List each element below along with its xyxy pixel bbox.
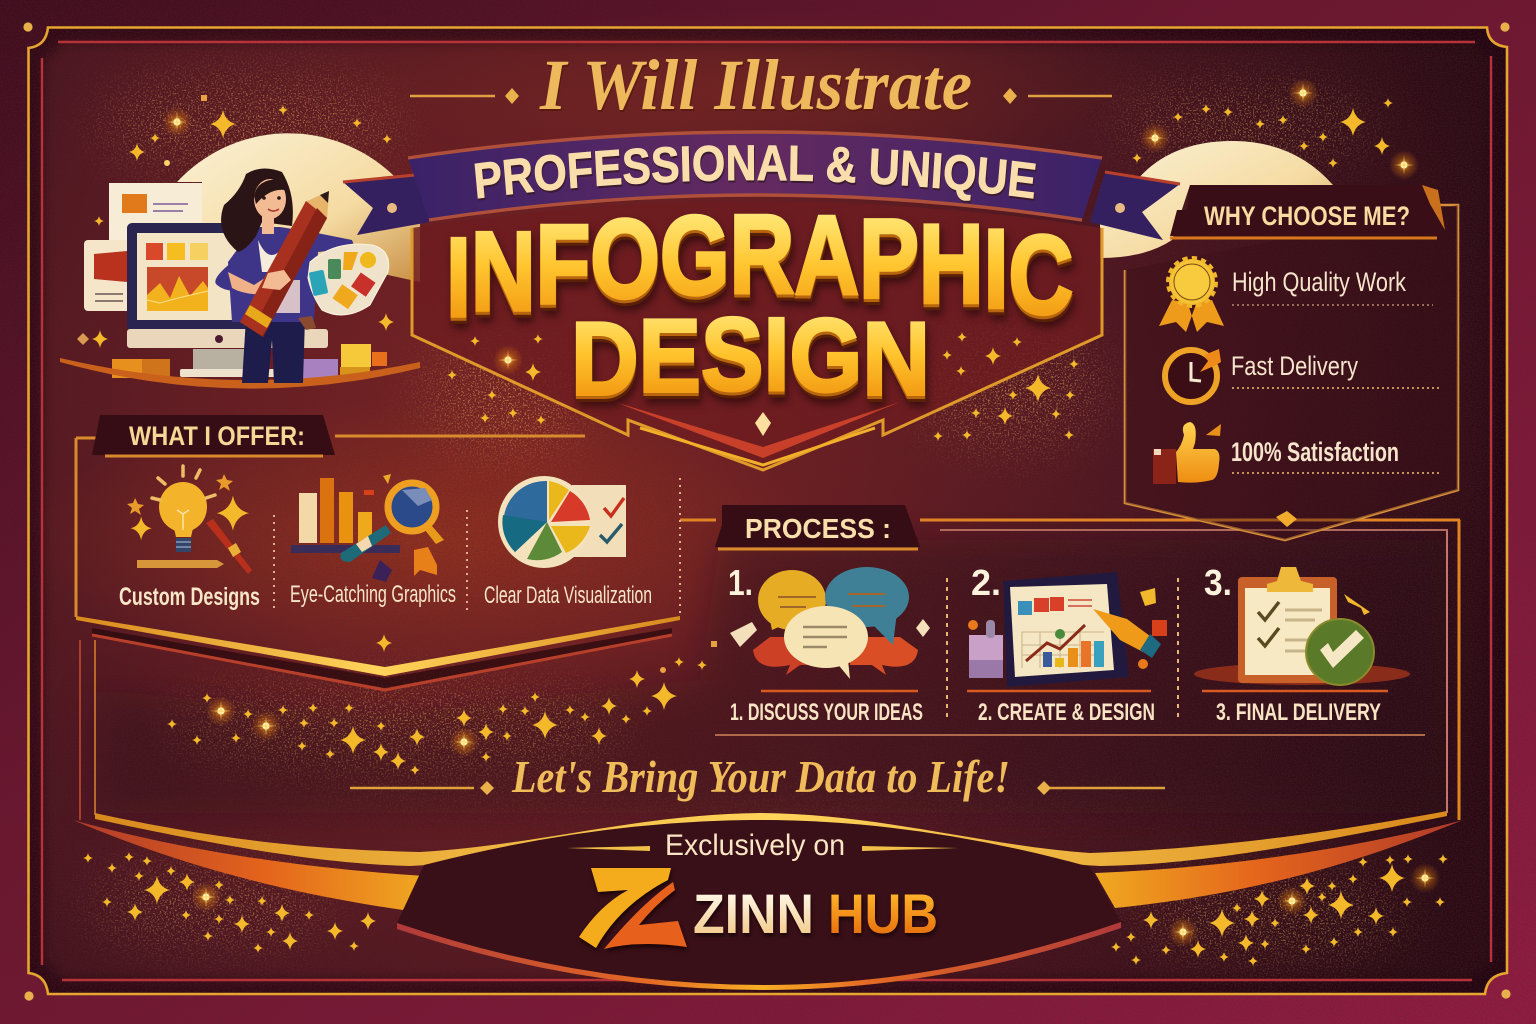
purple banner: [408, 132, 1102, 220]
bottom ribbon: [73, 811, 1463, 990]
sparkles: top left: [77, 95, 394, 348]
step 2: create: 2.: [971, 562, 1001, 603]
heading ribbon: WHY CHOOSE ME?: [1204, 201, 1410, 231]
panel: process: [715, 505, 1410, 726]
ribbon wedge left: [73, 820, 425, 910]
label: create and design: 2. CREATE & DESIGN: [978, 699, 1155, 726]
subtitle on banner: PROFESSIONAL & UNIQUE: [474, 145, 1037, 203]
step 3: final delivery: [1194, 562, 1410, 685]
monitor: [127, 223, 328, 377]
gold arc: [95, 811, 1447, 866]
logo: zinn hub: [579, 868, 938, 949]
sparkles: center left field: [167, 634, 717, 775]
document left: [84, 240, 132, 311]
item: fast delivery: [1165, 349, 1439, 402]
backdrop circle right: [1100, 141, 1333, 258]
step 1: discuss: 1.: [728, 562, 753, 603]
title line: I Will Illustrate: [410, 45, 1112, 125]
main title: [446, 193, 1073, 417]
heading ribbon: PROCESS :: [745, 513, 891, 544]
heading ribbon: WHAT I OFFER:: [129, 421, 305, 451]
item: 100% satisfaction: [1153, 422, 1439, 484]
logo: zinn hub: HUB: [828, 882, 938, 945]
icon: pie chart and checklist: [498, 476, 626, 568]
label: custom designs: Custom Designs: [119, 583, 260, 611]
sparkles: around shield: [447, 332, 1079, 441]
item: high quality work: High Quality Work: [1232, 267, 1406, 297]
logo mark: [579, 868, 687, 949]
palette: [308, 244, 389, 315]
blocks: [112, 344, 387, 380]
heading ribbon: [92, 415, 335, 456]
label: eye-catching graphics: Eye-Catching Graphics: [290, 581, 456, 608]
illustration: designer at monitor: [60, 168, 420, 389]
label: final delivery: 3. FINAL DELIVERY: [1216, 699, 1381, 726]
icon: light bulb: [127, 466, 252, 574]
heading ribbon: [715, 505, 920, 549]
item: fast delivery: Fast Delivery: [1231, 351, 1358, 381]
backdrop circle left: [177, 133, 420, 282]
step 3: final delivery: 3.: [1204, 562, 1232, 603]
main title: INFOGRAPHIC: [446, 193, 1073, 340]
sparkles: bottom right: [1111, 854, 1448, 966]
pencil: [240, 191, 329, 337]
text: exclusively on: Exclusively on: [665, 829, 845, 862]
heading ribbon: [1170, 185, 1445, 238]
item: 100% satisfaction: 100% Satisfaction: [1231, 437, 1399, 467]
text: exclusively on: [567, 829, 958, 862]
title line: I Will Illustrate: I Will Illustrate: [539, 45, 972, 125]
base dish: [60, 358, 420, 389]
inner panel lines: [80, 520, 1460, 820]
label: discuss your ideas: 1. DISCUSS YOUR IDEAS: [730, 699, 923, 726]
document back: [109, 183, 202, 243]
tagline: [350, 752, 1165, 802]
banner tails: [343, 172, 1180, 240]
icon: bars and magnifier: [291, 474, 444, 582]
step 1: discuss: [728, 562, 930, 679]
tagline: Let's Bring Your Data to Life!: [511, 752, 1010, 802]
panel: what I offer: [76, 415, 680, 690]
item: high quality work: [1159, 259, 1433, 332]
ribbon wedge right: [1095, 820, 1463, 908]
shield outline: [412, 202, 1102, 470]
step 2: create: [968, 562, 1167, 687]
label: clear data visualization: Clear Data Visualization: [484, 582, 652, 609]
wordmark: ZINN: [693, 882, 814, 945]
central plaque: [397, 820, 1121, 985]
panel: why choose me: [1125, 185, 1458, 540]
sparkles: bottom left: [83, 852, 376, 953]
main title: DESIGN: [571, 295, 930, 417]
sparkles: top right: [1132, 78, 1419, 180]
woman: [215, 168, 355, 383]
